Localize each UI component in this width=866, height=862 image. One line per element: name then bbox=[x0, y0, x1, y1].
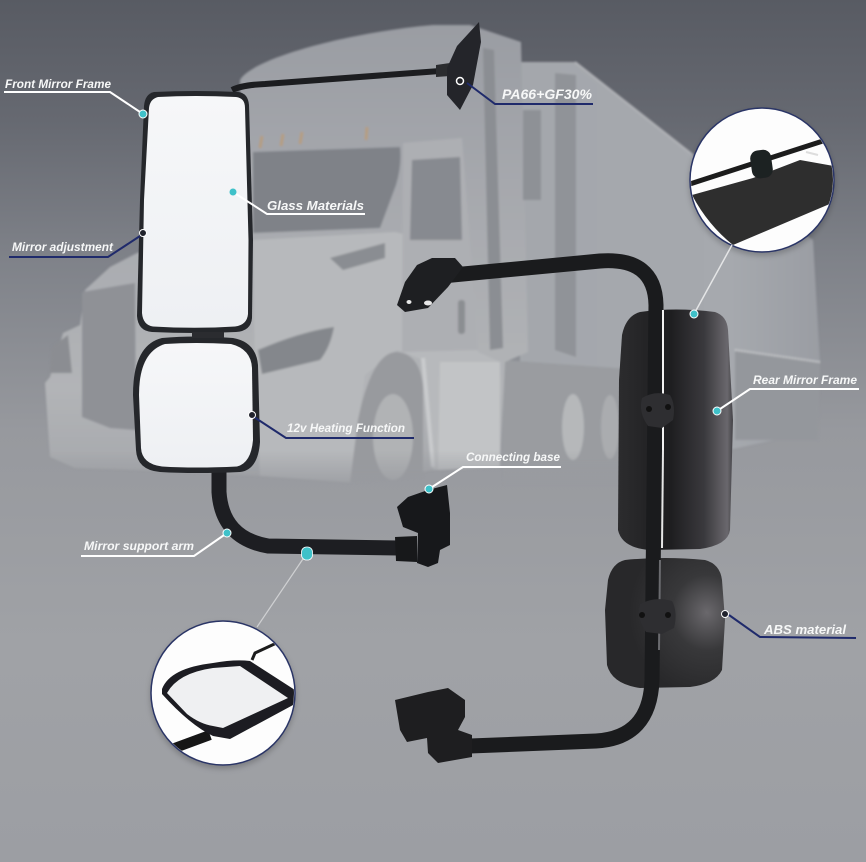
lower base bbox=[395, 688, 472, 763]
trailer undercarriage bbox=[735, 351, 812, 440]
front wheel rim bbox=[373, 394, 413, 480]
leader: rear mirror detail bbox=[690, 245, 732, 318]
callout: 12v Heating Function bbox=[248, 412, 414, 438]
grille bbox=[82, 283, 136, 430]
trailer roof edge bbox=[575, 62, 693, 155]
upper clamp bbox=[641, 393, 674, 428]
callout: Mirror support arm: Mirror support arm bbox=[84, 541, 194, 553]
cab silhouette bbox=[45, 25, 528, 483]
front wheel arch bbox=[353, 352, 424, 471]
lower mirror glass bbox=[139, 343, 253, 468]
truck background photo bbox=[45, 25, 820, 485]
fender lip bbox=[423, 358, 433, 467]
tube highlight bbox=[662, 310, 664, 450]
clamp screws bbox=[639, 404, 671, 618]
lower body highlight bbox=[253, 232, 438, 471]
connecting base bbox=[397, 485, 450, 567]
callout: Connecting base: Connecting base bbox=[466, 452, 561, 464]
headlight bbox=[258, 327, 334, 374]
rear wheels bbox=[562, 394, 584, 460]
windshield bbox=[253, 147, 400, 233]
callout: Rear Mirror Frame bbox=[713, 375, 859, 415]
callout: 12v Heating Function: 12v Heating Function bbox=[287, 423, 405, 435]
callout: Mirror support arm bbox=[81, 529, 231, 556]
callout: PA66+GF30% bbox=[456, 78, 593, 104]
shell highlight bbox=[806, 152, 818, 155]
trailer bbox=[520, 62, 820, 470]
lower clamp bbox=[639, 599, 676, 634]
rear mirror assembly bbox=[395, 258, 733, 763]
lower rear shell bbox=[605, 558, 725, 688]
lower support arm bbox=[219, 470, 398, 548]
upper base bbox=[397, 258, 463, 312]
clamp close-up bbox=[750, 150, 773, 178]
door frame and window bbox=[402, 138, 478, 352]
mirror frame close-up bbox=[162, 660, 295, 739]
callout: Front Mirror Frame: Front Mirror Frame bbox=[5, 79, 112, 91]
callout: ABS material bbox=[722, 610, 856, 638]
upper base bolts bbox=[406, 300, 432, 306]
rear mirror tube bbox=[442, 261, 656, 746]
rear chassis bbox=[504, 360, 620, 460]
main mirror frame bbox=[137, 91, 253, 333]
mirror hinge bbox=[192, 332, 224, 338]
steps panel bbox=[439, 362, 500, 462]
upper mounting arm bbox=[232, 22, 481, 110]
arm collar bbox=[395, 536, 417, 562]
upper rear shell bbox=[618, 310, 733, 550]
main mirror glass bbox=[142, 96, 248, 328]
side vent bbox=[330, 243, 385, 270]
roof marker lights bbox=[260, 127, 367, 148]
upper mirror corner bbox=[250, 642, 276, 661]
leader: support joint detail bbox=[257, 547, 312, 627]
tube close-up bbox=[690, 140, 826, 184]
lower mirror frame bbox=[133, 336, 260, 473]
callout: ABS material: ABS material bbox=[763, 623, 847, 637]
callout: Connecting base bbox=[425, 452, 561, 493]
top mounting base bbox=[447, 22, 481, 110]
trailer bottom rail bbox=[735, 350, 820, 362]
vertical strip bbox=[483, 48, 503, 350]
shell close-up bbox=[692, 160, 834, 245]
detail circle: mirror support joint bbox=[151, 621, 295, 765]
callout: Mirror adjustment: Mirror adjustment bbox=[12, 242, 114, 254]
support tube close-up bbox=[172, 735, 210, 749]
door handle bbox=[458, 300, 465, 334]
fender lens bbox=[50, 335, 72, 373]
callout: Mirror adjustment bbox=[9, 230, 146, 257]
callout: Glass Materials bbox=[230, 188, 365, 214]
callout: PA66+GF30%: PA66+GF30% bbox=[502, 86, 593, 102]
front mirror assembly bbox=[133, 22, 481, 567]
callout: Front Mirror Frame bbox=[4, 79, 147, 118]
callout: Rear Mirror Frame: Rear Mirror Frame bbox=[753, 375, 858, 387]
callout: Glass Materials: Glass Materials bbox=[267, 198, 364, 213]
detail circle: rear mirror shell bbox=[690, 108, 834, 252]
mirror glass close-up bbox=[167, 666, 288, 728]
